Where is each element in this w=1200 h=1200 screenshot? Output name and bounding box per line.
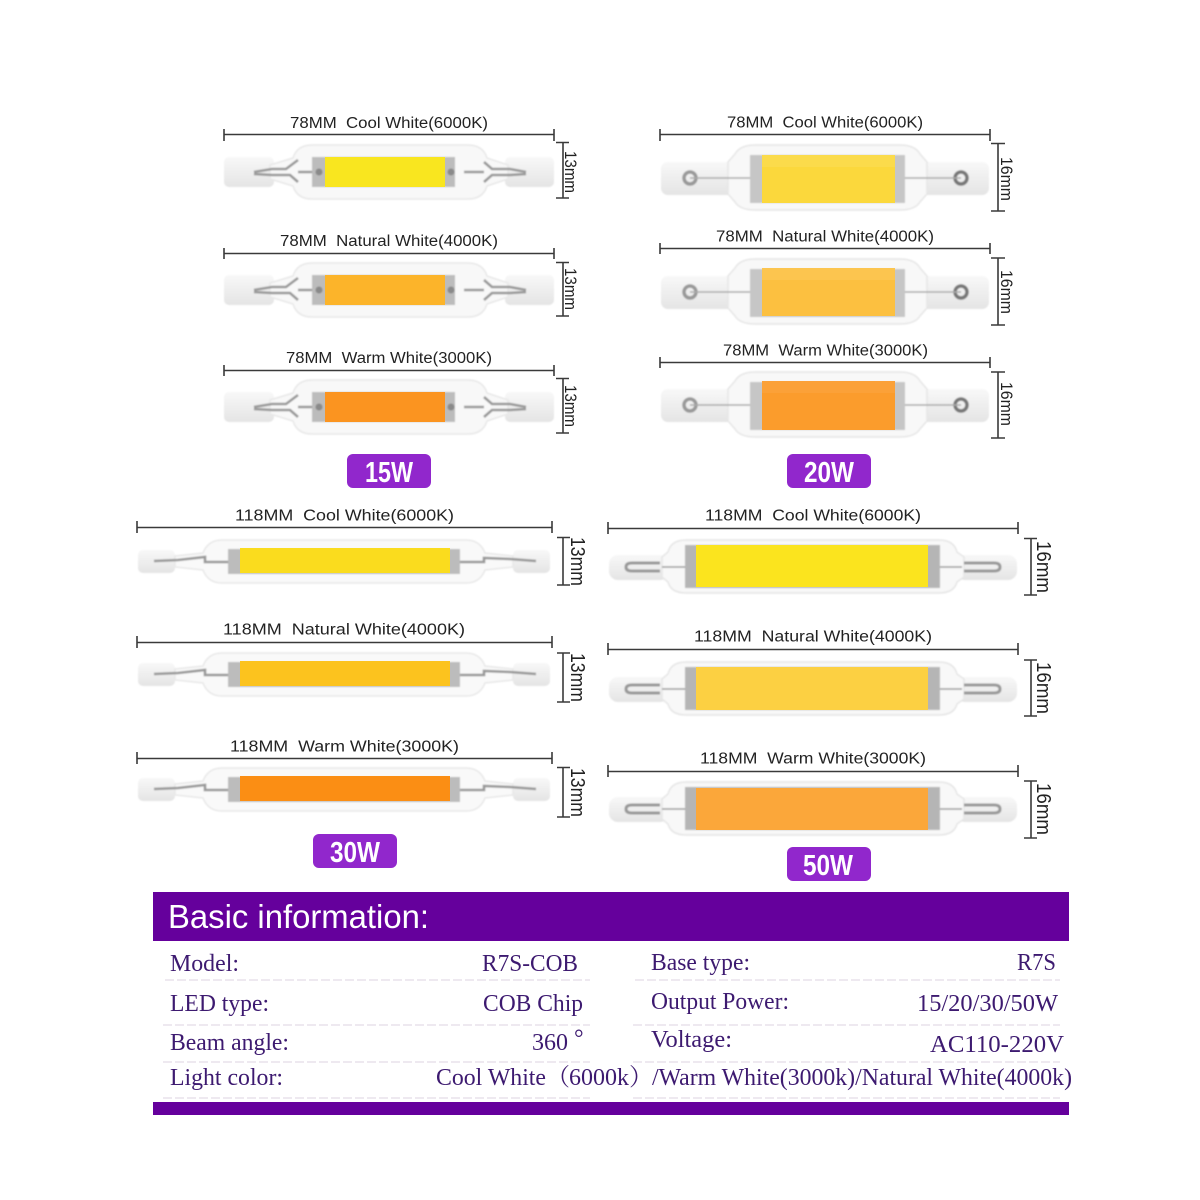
- bulb: 30W cool white: [137, 508, 588, 586]
- panel: basic information table: [153, 892, 1072, 1115]
- badge: 50W: [787, 847, 871, 882]
- bulb: 15W warm white: 78MM Warm White(3000K): [286, 350, 492, 367]
- badge: 20W: [787, 454, 871, 489]
- row: light color: /Warm White(3000k)/Natural White(4000k): [652, 1065, 1072, 1091]
- bulb: 50W warm white: 16mm: [1032, 783, 1054, 835]
- bulb: 50W cool white: [608, 508, 1054, 595]
- badge: 50W: 50W: [803, 850, 854, 882]
- row: light color: [163, 1065, 1072, 1098]
- panel: 15W bulbs: [224, 115, 580, 489]
- table header: [153, 892, 1069, 941]
- row: LED type and output power: Output Power:: [651, 989, 789, 1015]
- bulb: 30W warm white: [137, 738, 588, 817]
- badge: 20W: 20W: [804, 457, 855, 489]
- bulb: 20W warm white: [660, 342, 1016, 438]
- row: light color: （: [546, 1065, 570, 1091]
- bulb: 20W warm white: 78MM Warm White(3000K): [723, 342, 928, 360]
- row: model and base type: Base type:: [651, 950, 750, 976]
- bulb: 30W warm white: 118MM Warm White(3000K): [230, 738, 459, 756]
- bulb: 15W cool white: 78MM Cool White(6000K): [290, 115, 488, 132]
- row: light color: 6000k: [569, 1065, 629, 1091]
- badge: 30W: [313, 834, 397, 869]
- bulb: 30W natural white: 13mm: [566, 653, 588, 702]
- row: LED type and output power: LED type:: [170, 991, 269, 1017]
- bulb: 50W natural white: [608, 628, 1054, 716]
- row: beam angle and voltage: °: [574, 1026, 584, 1052]
- row: model and base type: Model:: [170, 951, 239, 977]
- row: model and base type: [165, 950, 1060, 980]
- row: LED type and output power: COB Chip: [483, 991, 583, 1017]
- panel: 30W bulbs: [137, 508, 588, 869]
- bulb: 50W natural white: 118MM Natural White(4000K): [694, 628, 932, 646]
- row: beam angle and voltage: AC110-220V: [930, 1032, 1065, 1058]
- row: LED type and output power: 15/20/30/50W: [917, 991, 1058, 1017]
- bulb: 15W natural white: 13mm: [561, 268, 580, 310]
- bulb: 20W natural white: 78MM Natural White(4000K): [716, 228, 934, 246]
- bulb: 50W cool white: 16mm: [1032, 541, 1054, 593]
- bulb: 30W cool white: 13mm: [566, 537, 588, 586]
- bulb: 50W cool white: 118MM Cool White(6000K): [705, 508, 921, 524]
- badge: 15W: 15W: [365, 457, 413, 489]
- bulb: 20W cool white: 16mm: [997, 157, 1016, 201]
- bulb: 20W natural white: [660, 228, 1016, 325]
- bulb: 15W cool white: 13mm: [561, 151, 580, 193]
- bulb: 15W cool white: [224, 115, 580, 199]
- badge: 15W: [347, 454, 431, 489]
- bulb: 30W cool white: 118MM Cool White(6000K): [235, 508, 454, 524]
- bulb: 20W warm white: 16mm: [997, 382, 1016, 426]
- bulb: 15W natural white: 78MM Natural White(4000K): [280, 233, 498, 250]
- row: model and base type: R7S-COB: [482, 951, 578, 977]
- bulb: 50W warm white: [608, 750, 1054, 838]
- table header: Basic information:: [168, 898, 429, 935]
- row: light color: Cool White: [436, 1065, 546, 1091]
- bulb: 30W natural white: 118MM Natural White(4000K): [223, 622, 465, 638]
- bulb: 20W natural white: 16mm: [997, 270, 1016, 314]
- bulb: 15W natural white: [224, 233, 580, 317]
- row: light color: ）: [629, 1065, 653, 1091]
- badge: 30W: 30W: [330, 837, 381, 869]
- row: beam angle and voltage: 360: [532, 1030, 568, 1056]
- row: beam angle and voltage: Voltage:: [651, 1027, 732, 1053]
- row: model and base type: R7S: [1017, 950, 1056, 976]
- bulb: 15W warm white: [224, 350, 580, 434]
- panel: 20W bulbs: [660, 114, 1016, 489]
- panel: 50W bulbs: [608, 508, 1054, 882]
- bulb: 20W cool white: [660, 114, 1016, 211]
- row: beam angle and voltage: [163, 1026, 1065, 1062]
- row: LED type and output power: [163, 989, 1060, 1025]
- bulb: 30W warm white: 13mm: [566, 768, 588, 817]
- bulb: 15W warm white: 13mm: [561, 385, 580, 427]
- row: beam angle and voltage: Beam angle:: [170, 1030, 289, 1056]
- bulb: 50W warm white: 118MM Warm White(3000K): [700, 750, 926, 768]
- row: light color: Light color:: [170, 1065, 283, 1091]
- bulb: 50W natural white: 16mm: [1032, 662, 1054, 714]
- bulb: 30W natural white: [137, 622, 588, 702]
- table footer bar: [153, 1102, 1069, 1115]
- bulb: 20W cool white: 78MM Cool White(6000K): [727, 114, 923, 132]
